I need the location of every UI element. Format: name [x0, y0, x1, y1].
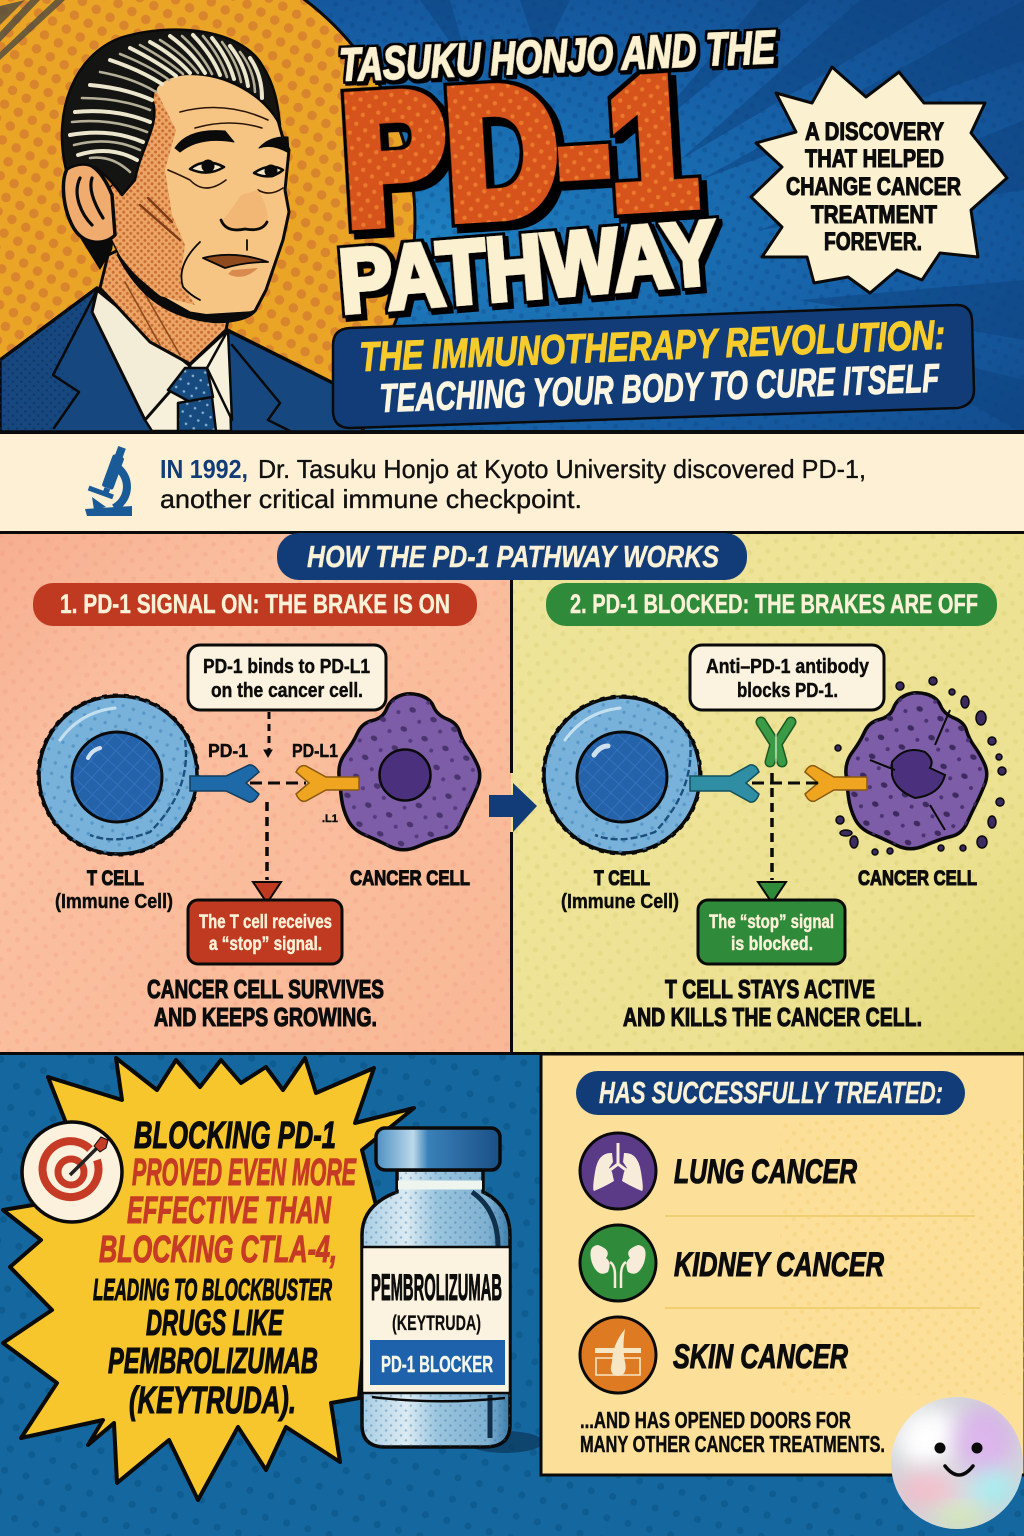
- burst text: LEADING TO BLOCKBUSTER: [93, 1272, 332, 1307]
- callout: binding: on the cancer cell.: [211, 680, 363, 702]
- ear: [63, 163, 115, 242]
- outcome text right: AND KILLS THE CANCER CELL.: [623, 1002, 922, 1032]
- bottom-left panel: PEMBROLIZUMAB: [371, 1267, 502, 1308]
- section heading pill: [277, 533, 747, 580]
- T cell: [38, 694, 198, 856]
- cell labels right: CANCER CELL: [858, 867, 977, 890]
- outcome text left: [147, 974, 384, 1032]
- title: [336, 21, 777, 333]
- callout: binding: [188, 645, 386, 710]
- callout: antibody: [690, 645, 884, 710]
- intro band: [0, 434, 1024, 531]
- item: kidney cancer: [580, 1225, 884, 1301]
- shadow behind the ear: [72, 225, 115, 270]
- cancer cell: [339, 694, 480, 850]
- panel: PD-1 blocked: [511, 533, 1024, 1053]
- cell labels: [55, 867, 470, 913]
- panel: PD-1 signal on: [0, 533, 511, 1053]
- closing note: ...AND HAS OPENED DOORS FOR: [580, 1407, 851, 1433]
- arrow between panels: [489, 783, 537, 832]
- panel heading: brake on: 1. PD-1 SIGNAL ON: THE BRAKE IS ON: [60, 589, 450, 619]
- starburst callout: TREATMENT: [811, 201, 937, 229]
- hair: [62, 30, 280, 195]
- burst text: PROVED EVEN MORE: [132, 1152, 357, 1194]
- panel heading: brakes off: [546, 583, 997, 626]
- receptor labels: PD-L1: [292, 741, 338, 761]
- brows and eyes: [175, 131, 234, 152]
- item: lung cancer: [580, 1133, 857, 1209]
- burst text: (KEYTRUDA).: [129, 1380, 296, 1422]
- panel: has successfully treated: [541, 1054, 1024, 1475]
- burst text: [93, 1115, 357, 1422]
- result box: stop signal: [188, 900, 342, 964]
- result box: stop signal: The T cell receives: [199, 912, 332, 933]
- PD-1 receptor teal: [690, 765, 759, 802]
- result box: stop signal: a “stop” signal.: [209, 934, 322, 955]
- cell labels right: T CELL: [594, 867, 650, 890]
- yellow burst: [3, 1058, 414, 1500]
- starburst callout: CHANGE CANCER: [786, 173, 961, 201]
- starburst callout: FOREVER.: [824, 228, 922, 256]
- starburst callout: [751, 67, 1007, 293]
- intro text: [160, 454, 866, 514]
- intro text: another critical immune checkpoint.: [160, 484, 582, 514]
- receptor labels: PD-1: [208, 741, 248, 761]
- bottom-left panel: [0, 1052, 1024, 1536]
- PD-L1 receptor: [296, 766, 359, 801]
- panel heading: brake on: [33, 583, 477, 626]
- item: lung cancer: LUNG CANCER: [674, 1153, 857, 1191]
- result box: stop blocked: is blocked.: [731, 934, 813, 955]
- portrait of Tasuku Honjo: [0, 30, 364, 432]
- intro text: IN 1992,: [160, 454, 248, 484]
- cell labels: CANCER CELL: [350, 867, 470, 890]
- subtitle banner: [333, 305, 974, 428]
- burst text: PEMBROLIZUMAB: [108, 1340, 318, 1381]
- vial: (KEYTRUDA): [392, 1312, 481, 1335]
- receptor labels: [208, 741, 338, 825]
- closing note: MANY OTHER CANCER TREATMENTS.: [580, 1431, 885, 1457]
- cell labels: (Immune Cell): [55, 891, 173, 913]
- PD-L1 receptor right: [805, 766, 867, 801]
- callout: antibody: blocks PD-1.: [737, 680, 838, 702]
- PD-1 receptor: [190, 765, 259, 802]
- section heading pill: HOW THE PD-1 PATHWAY WORKS: [307, 539, 719, 574]
- outcome text left: CANCER CELL SURVIVES: [147, 974, 384, 1004]
- icon: antibody: [761, 722, 791, 762]
- vial shadow: [467, 1431, 543, 1453]
- cell labels right: [561, 867, 977, 913]
- item: kidney cancer: KIDNEY CANCER: [674, 1246, 884, 1284]
- result box: stop blocked: The “stop” signal: [709, 912, 834, 933]
- outcome text right: [623, 974, 922, 1032]
- signal arrows right: [752, 773, 818, 903]
- burst text: DRUGS LIKE: [146, 1302, 284, 1343]
- cell labels right: (Immune Cell): [561, 891, 679, 913]
- closing note: [580, 1407, 885, 1457]
- orange sunburst circle: [0, 0, 415, 495]
- vial: PD-1 BLOCKER: [381, 1351, 493, 1377]
- debris: [835, 677, 1006, 855]
- title line: Tasuku Honjo and the: TASUKU HONJO AND THE: [338, 21, 777, 91]
- callout: antibody: Anti–PD-1 antibody: [706, 656, 870, 678]
- outcome text left: AND KEEPS GROWING.: [154, 1002, 377, 1032]
- nose and mouth: [221, 190, 268, 230]
- vial: [362, 1128, 510, 1447]
- icon: target with arrow: [22, 1122, 122, 1222]
- treated heading pill: [576, 1071, 965, 1115]
- damaged cancer cell: [835, 677, 1006, 855]
- title line: Pathway: PATHWAY: [336, 203, 720, 333]
- result box: stop blocked: [698, 900, 845, 964]
- outcome text right: T CELL STAYS ACTIVE: [665, 974, 875, 1004]
- callout: binding: PD-1 binds to PD-L1: [203, 656, 370, 678]
- receptor labels: .L1: [322, 813, 338, 825]
- burst text: EFFECTIVE THAN: [127, 1190, 332, 1232]
- pathway section: [0, 531, 1024, 1054]
- title line: PD-1: PD-1: [337, 38, 701, 263]
- neck: [100, 240, 232, 364]
- starburst callout: THAT HELPED: [805, 145, 944, 173]
- face: [108, 71, 289, 318]
- T cell active: [542, 696, 702, 854]
- item: skin cancer: SKIN CANCER: [673, 1338, 848, 1376]
- burst text: BLOCKING CTLA-4,: [99, 1229, 337, 1271]
- item: skin cancer: [580, 1317, 848, 1393]
- signal arrows: [250, 712, 306, 903]
- starburst callout: A DISCOVERY: [805, 118, 944, 146]
- icon: microscope: [85, 446, 132, 516]
- cell labels: T CELL: [87, 867, 144, 890]
- intro text: Dr. Tasuku Honjo at Kyoto University discovered PD-1,: [258, 454, 866, 484]
- corner streaks: [0, 0, 65, 60]
- header panel: [0, 0, 1024, 495]
- mascot orb: [891, 1397, 1023, 1529]
- burst text: BLOCKING PD-1: [134, 1115, 336, 1157]
